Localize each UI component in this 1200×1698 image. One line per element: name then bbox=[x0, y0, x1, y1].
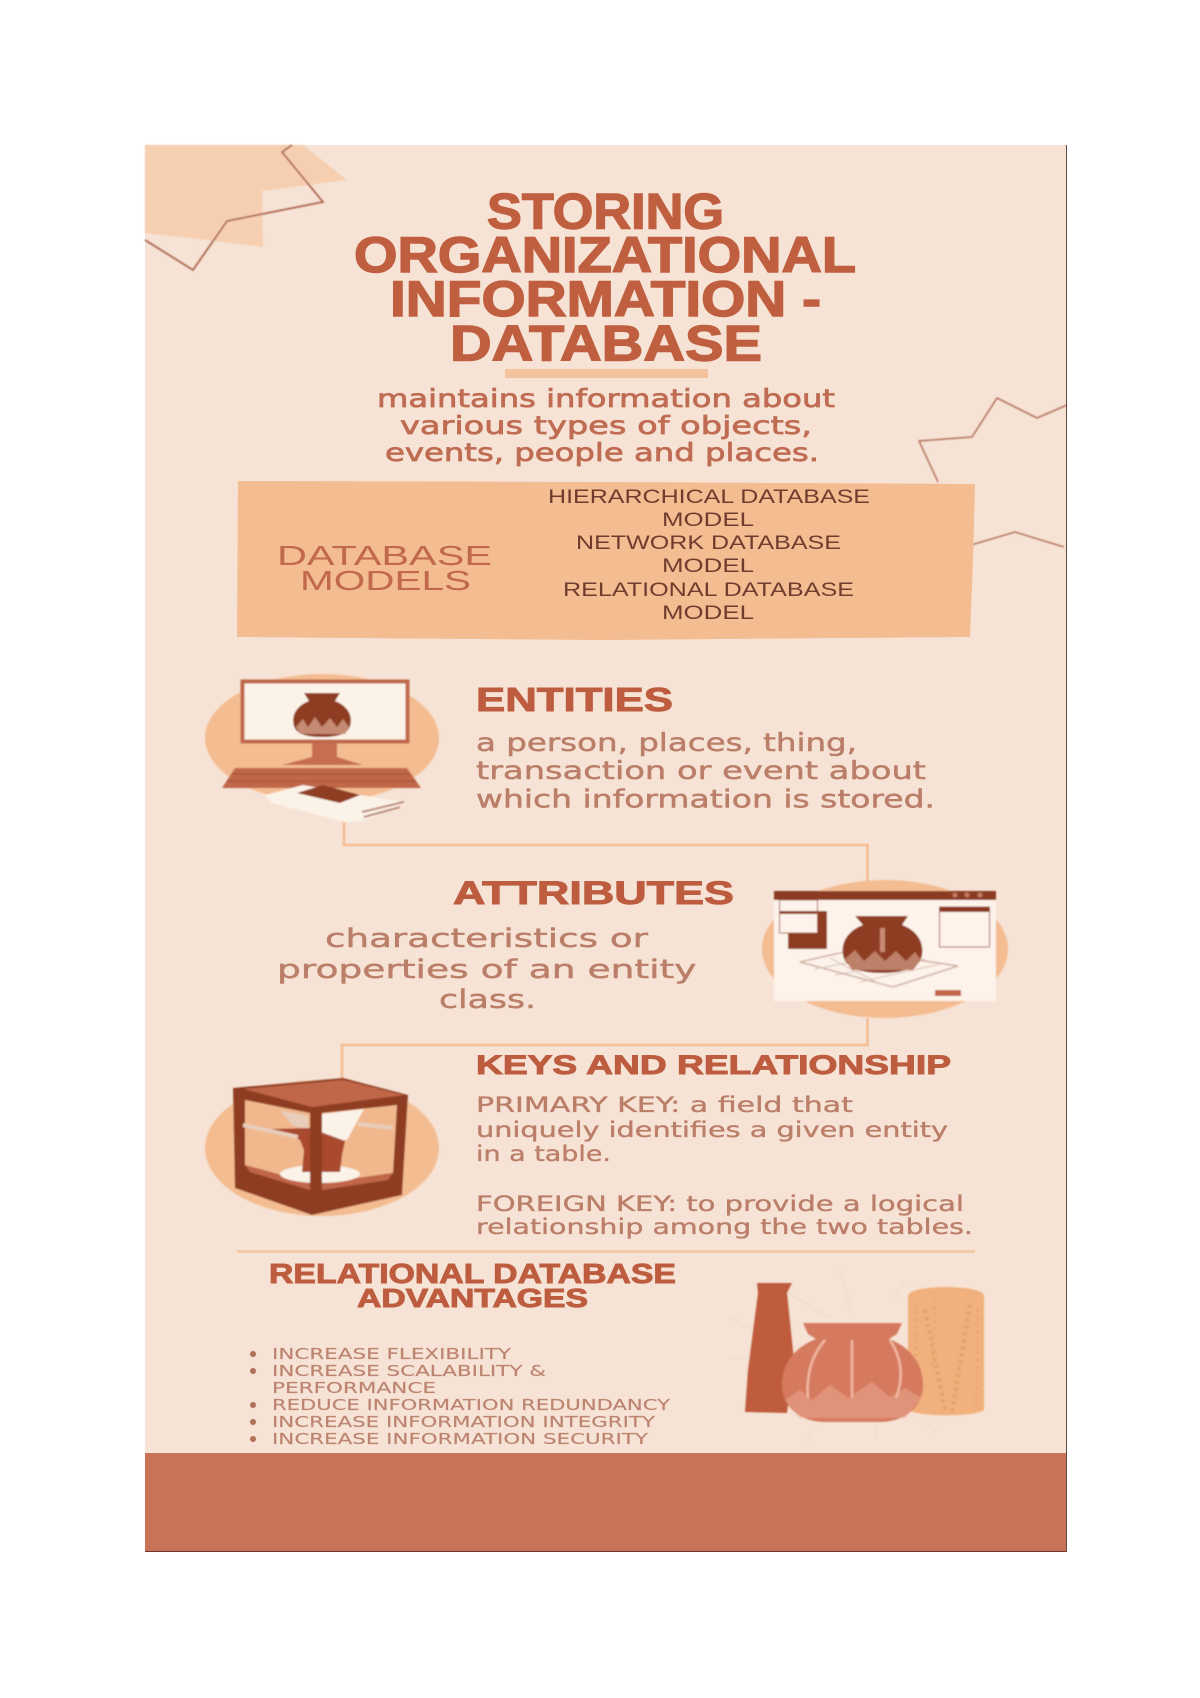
arrow: connector entities to attributes bbox=[344, 821, 868, 881]
icon: display cube with vase bbox=[205, 1078, 439, 1216]
text: entities description: a person, places, thing, bbox=[476, 728, 857, 757]
database models heading: MODELS bbox=[300, 565, 471, 596]
subtitle: various types of objects, bbox=[400, 411, 812, 440]
title: INFORMATION - bbox=[390, 271, 821, 327]
panel: database models bbox=[237, 481, 975, 640]
heading: relational database advantages: ADVANTAGES bbox=[357, 1285, 588, 1313]
text: attributes description: class. bbox=[439, 985, 536, 1015]
title bbox=[354, 184, 856, 372]
text: foreign key: FOREIGN KEY: to provide a logical bbox=[476, 1192, 964, 1216]
list: advantages: INCREASE SCALABILITY & bbox=[272, 1362, 546, 1380]
heading: keys and relationship: KEYS AND RELATIONSHIP bbox=[476, 1050, 951, 1080]
poster background bbox=[145, 145, 1067, 1552]
list: advantages: INCREASE INFORMATION SECURITY bbox=[272, 1430, 649, 1448]
database model list: MODEL bbox=[662, 556, 754, 577]
database model list: MODEL bbox=[662, 510, 754, 531]
list: advantages bbox=[250, 1345, 671, 1448]
title: ORGANIZATIONAL bbox=[354, 227, 856, 283]
text: entities description: transaction or event about bbox=[476, 756, 927, 785]
title: DATABASE bbox=[450, 316, 762, 372]
list: advantages: INCREASE INFORMATION INTEGRITY bbox=[272, 1413, 656, 1431]
text: attributes description bbox=[277, 924, 696, 1015]
text: primary key: PRIMARY KEY: a field that bbox=[476, 1093, 853, 1117]
list: advantages: INCREASE FLEXIBILITY bbox=[272, 1345, 512, 1363]
subtitle: maintains information about bbox=[377, 384, 835, 413]
list: advantages: REDUCE INFORMATION REDUNDANCY bbox=[272, 1396, 671, 1414]
subtitle: events, people and places. bbox=[385, 438, 819, 467]
icon: software window with vase bbox=[762, 880, 1008, 1018]
subtitle bbox=[377, 384, 835, 467]
database model list: NETWORK DATABASE bbox=[576, 533, 841, 554]
decoration: right zigzag bbox=[919, 398, 1067, 547]
database models heading: DATABASE bbox=[277, 540, 492, 571]
text: foreign key bbox=[476, 1192, 973, 1239]
text: entities description: which information is stored. bbox=[476, 784, 935, 814]
heading: relational database advantages bbox=[269, 1258, 676, 1313]
heading: entities: ENTITIES bbox=[476, 682, 673, 719]
decoration: top-left peach shape and zigzag bbox=[145, 145, 347, 270]
text: attributes description: properties of an entity bbox=[277, 955, 696, 985]
footer band bbox=[145, 1453, 1067, 1552]
text: primary key: in a table. bbox=[476, 1142, 611, 1166]
icon: three vases bbox=[730, 1268, 984, 1440]
heading: relational database advantages: RELATIONAL DATABASE bbox=[269, 1258, 676, 1289]
icon: computer with vase and book bbox=[205, 674, 439, 822]
database model list: MODEL bbox=[662, 603, 754, 624]
text: primary key bbox=[476, 1093, 948, 1166]
arrow: connector attributes to keys bbox=[342, 1018, 868, 1080]
list: advantages: PERFORMANCE bbox=[272, 1379, 436, 1397]
text: foreign key: relationship among the two tables. bbox=[476, 1215, 973, 1239]
heading: attributes: ATTRIBUTES bbox=[453, 875, 734, 911]
text: primary key: uniquely identifies a given entity bbox=[476, 1118, 948, 1142]
text: entities description bbox=[476, 728, 935, 814]
database model list: RELATIONAL DATABASE bbox=[563, 580, 854, 601]
title underline bar bbox=[505, 369, 708, 378]
text: attributes description: characteristics or bbox=[325, 924, 648, 954]
database models heading bbox=[277, 540, 492, 596]
title: STORING bbox=[487, 184, 724, 240]
database model list bbox=[548, 487, 870, 624]
database model list: HIERARCHICAL DATABASE bbox=[548, 487, 870, 508]
